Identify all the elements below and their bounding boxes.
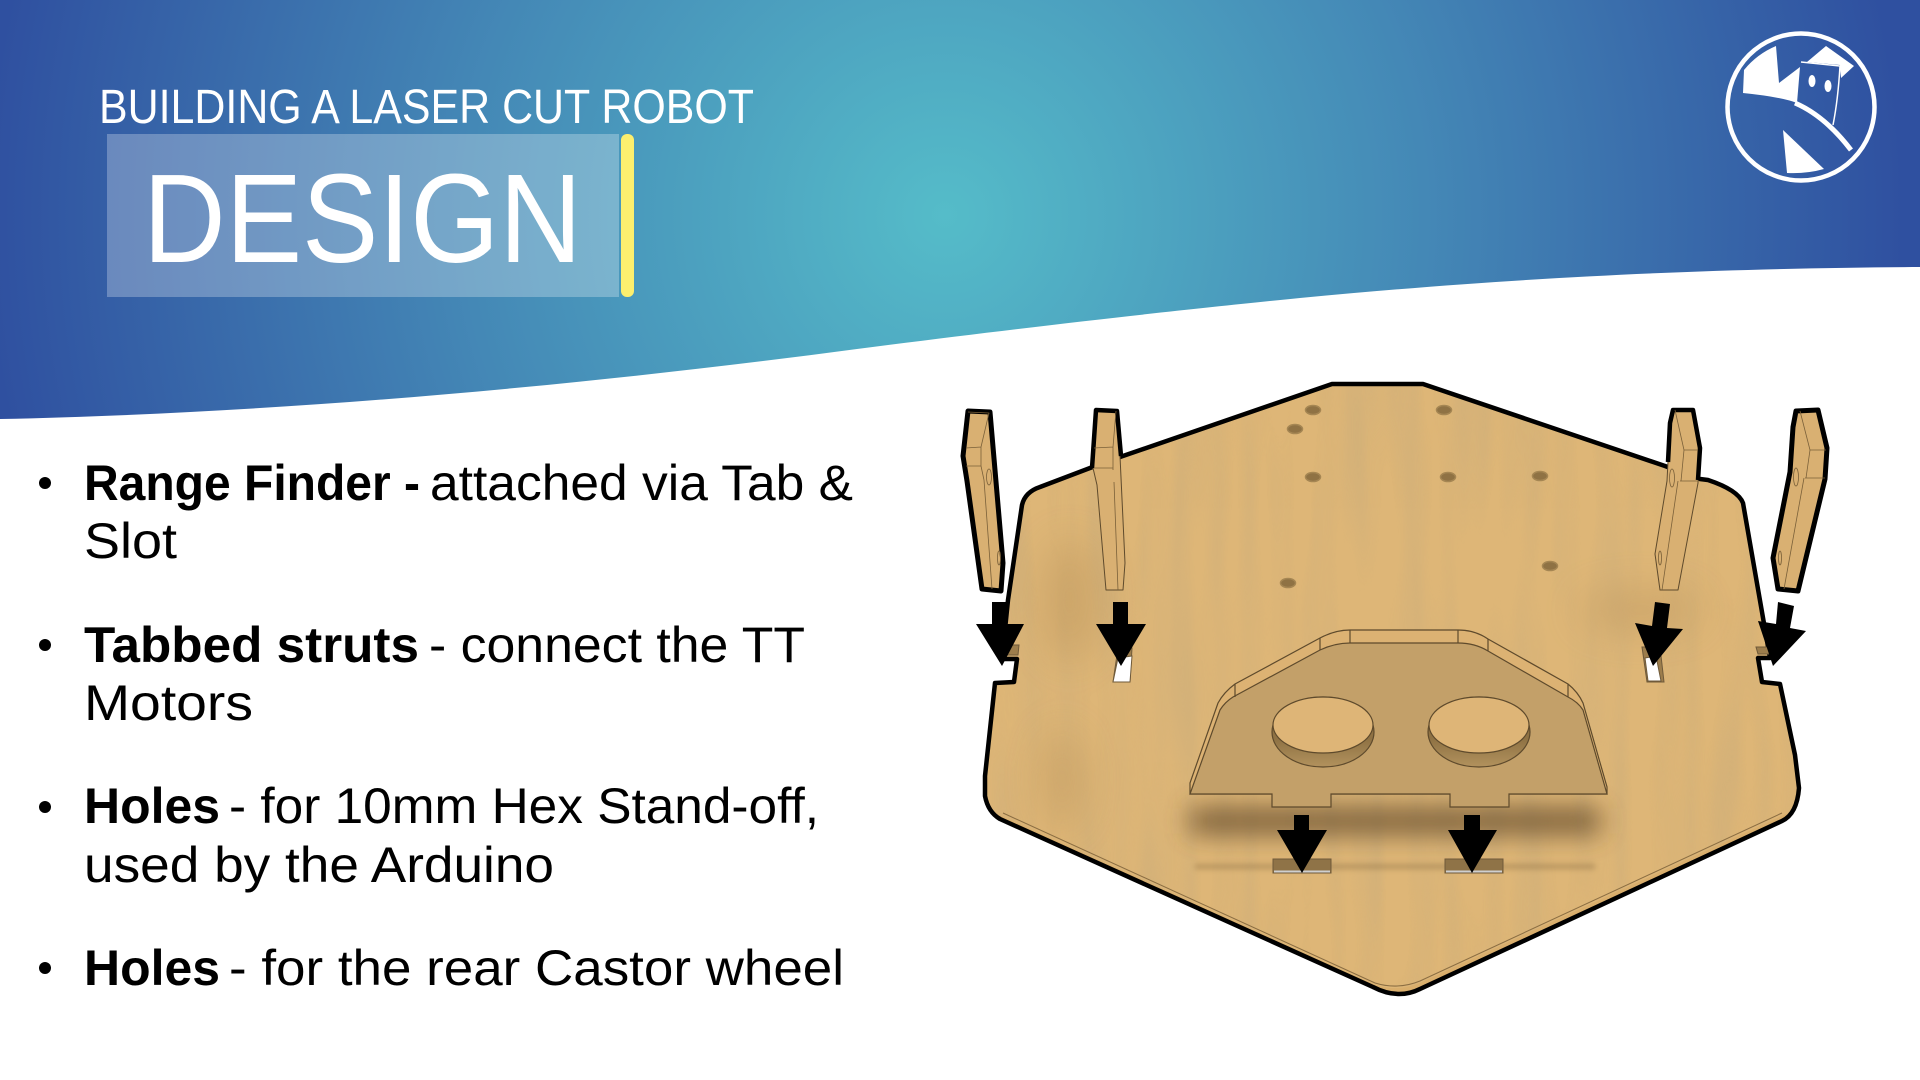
range finder plate xyxy=(1190,630,1607,807)
strut: inner right xyxy=(1655,410,1700,590)
mounting holes xyxy=(1280,406,1558,588)
right sensor hole xyxy=(1428,697,1530,767)
bullet: tabbed struts: Tabbed struts xyxy=(84,617,419,673)
bullet: range finder: attached via Tab & xyxy=(430,455,853,511)
bullet: holes for stand-off xyxy=(39,778,819,893)
bullet: range finder: Slot xyxy=(84,513,177,569)
bullet: holes for stand-off: - for 10mm Hex Stand-off, xyxy=(229,778,819,834)
heading: design: DESIGN xyxy=(143,148,582,289)
bullet: tabbed struts: - connect the TT xyxy=(429,617,805,673)
title block xyxy=(99,81,754,297)
diagram: laser cut robot base plate xyxy=(963,380,1827,1010)
strut: outer left xyxy=(963,411,1003,591)
wooden base plate xyxy=(980,380,1810,1010)
arrow: right sensor tab xyxy=(1448,815,1497,873)
icon: robot logo xyxy=(1728,34,1874,180)
bullet: holes for castor: - for the rear Castor wheel xyxy=(229,940,844,996)
bullet: tabbed struts xyxy=(39,617,805,731)
arrow: inner left strut xyxy=(1096,602,1146,666)
bullet: holes for stand-off: used by the Arduino xyxy=(84,837,554,893)
arrow: inner right strut xyxy=(1635,602,1683,666)
bullet: range finder: Range Finder - xyxy=(84,455,420,511)
strut: inner left xyxy=(1092,410,1125,590)
arrow: left sensor tab xyxy=(1277,815,1327,873)
translucent title box xyxy=(107,134,619,297)
header banner xyxy=(0,0,1920,419)
bullet: range finder xyxy=(39,455,853,569)
bullet: holes for stand-off: Holes xyxy=(84,778,220,834)
slots in plate xyxy=(1006,645,1770,873)
bullet: holes for castor: Holes xyxy=(84,940,220,996)
yellow accent bar xyxy=(621,134,634,297)
arrow: outer left strut xyxy=(976,602,1024,666)
subtitle: BUILDING A LASER CUT ROBOT xyxy=(99,81,754,134)
left sensor hole xyxy=(1272,697,1374,767)
arrow: outer right strut xyxy=(1758,602,1806,666)
strut: outer right xyxy=(1773,410,1827,591)
bullet: tabbed struts: Motors xyxy=(84,675,253,731)
bullet list xyxy=(39,455,853,996)
